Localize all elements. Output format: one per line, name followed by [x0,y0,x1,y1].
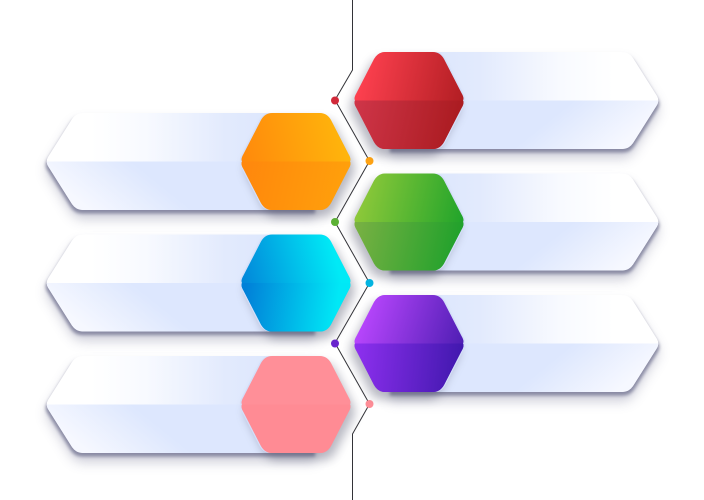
icon: blue hexagon [240,234,354,338]
panel: purple bar [350,295,659,401]
icon: purple hexagon [350,295,465,399]
panel: blue bar [46,234,354,340]
connector line with dots [331,0,374,500]
icon: red hexagon [350,52,465,156]
icon: pink hexagon [240,356,354,460]
panel: red bar [350,52,659,158]
panel: orange bar [46,113,354,219]
panel: pink bar [46,356,354,462]
icon: orange hexagon [240,113,354,217]
icon: green hexagon [350,174,465,278]
panel: green bar [350,174,659,280]
